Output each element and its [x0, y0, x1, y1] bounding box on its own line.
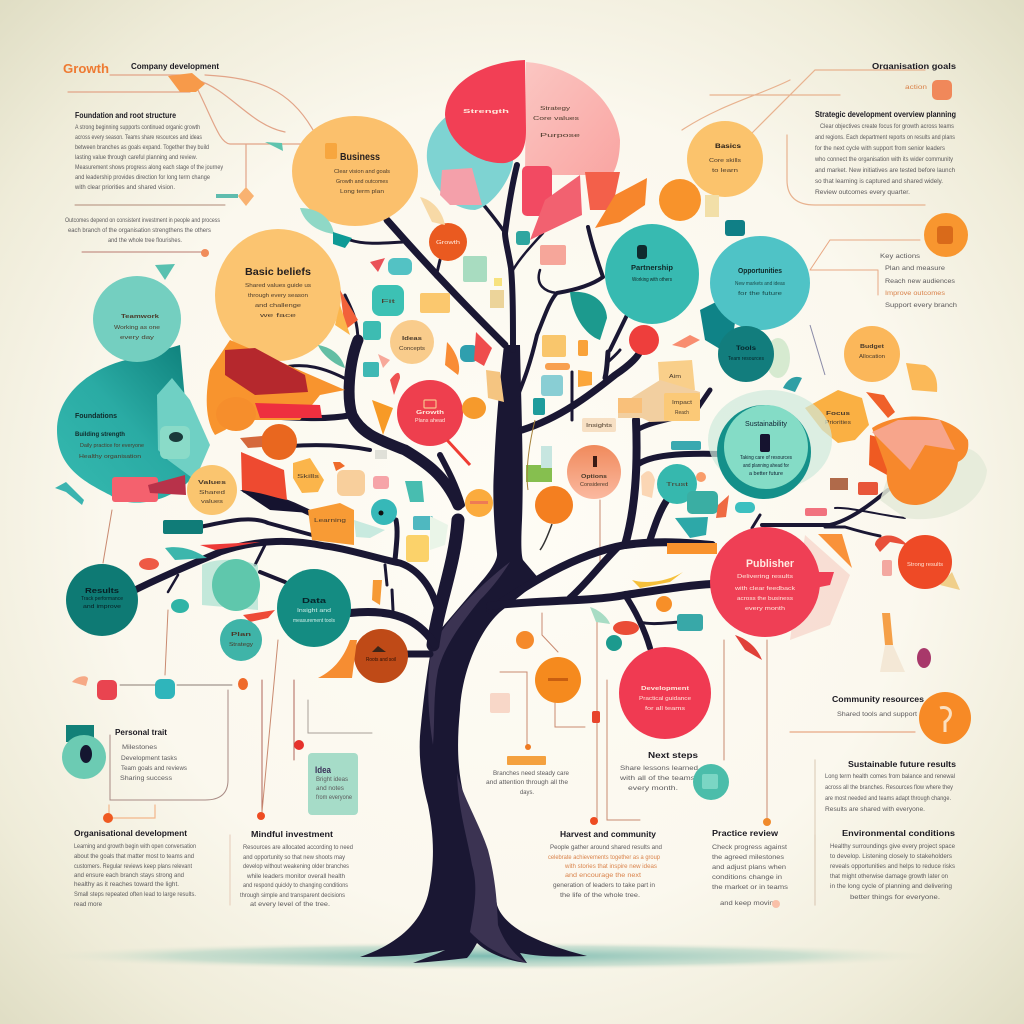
text panel: bottom column 4: and keep moving. [720, 901, 780, 907]
text panel: bottom column 4: and adjust plans when [712, 865, 786, 871]
text panel: top left: Growth [63, 61, 109, 76]
text panel: bottom column 2: develop without weakening older branches [243, 864, 349, 870]
circle: dark teal lower left: and improve [83, 604, 121, 610]
text panel: bottom column 1: healthy as it reaches toward the light. [74, 882, 179, 888]
tags and leaves centre right: Trust [666, 482, 689, 488]
text panel: bottom column 1: Small steps repeated often lead to large results. [74, 892, 196, 898]
circles: left cluster: Strategy [229, 642, 253, 648]
text panel: upper right callout [810, 240, 957, 309]
text panel: top left: between branches as goals expand. Together they build [75, 145, 209, 151]
text panel: centre below tree: every month. [628, 786, 678, 792]
circle: red lower: Practical guidance [639, 696, 691, 702]
text panel: top right: Strategic development overview planning [815, 110, 956, 119]
text panel: upper right callout: Support every branch [885, 303, 957, 309]
small leaves and tags upper left tree: Ideas [402, 336, 422, 342]
circles: left cluster: measurement tools [293, 618, 335, 624]
circles: centre right of trunk [465, 418, 621, 550]
text panel: centre below tree: and attention through all the [486, 780, 569, 786]
ribbon cluster left [112, 340, 345, 613]
circle: red lower [619, 647, 711, 739]
right orange cluster: Budget [860, 344, 884, 350]
note card: mint [308, 753, 358, 815]
text panel: upper right callout: Improve outcomes [885, 291, 945, 297]
text panel: top left: Measurement shows progress along each stage of the journey [75, 165, 223, 171]
circle: big red right: across the business [737, 596, 794, 602]
circle: teal upper right: Working with others [632, 277, 672, 283]
text panel: top right: so that learning is captured and shared widely. [815, 179, 943, 185]
circle: orange topic top: Growth and outcomes [336, 179, 388, 185]
text panel: bottom column 5: Environmental conditions [842, 829, 956, 838]
text panel: bottom column 1: customers. Regular reviews keep plans relevant [74, 864, 192, 870]
tags upper centre right [516, 231, 592, 415]
circle: teal ring: Taking care of resources [740, 455, 792, 461]
circle: red centre: Growth [416, 410, 444, 416]
circle: orange lower centre [535, 657, 581, 703]
text panel: top right: and regions. Each department reports on results and plans [815, 135, 955, 141]
bubble group: top red and pink: Strength [463, 109, 509, 115]
text panel: lower right heading: Results are shared with everyone. [825, 807, 925, 813]
ground shadow [40, 942, 940, 970]
text panel: bottom column 1 [74, 829, 196, 908]
circle: yellow upper right: Core skills [709, 158, 741, 164]
note card: mint: and notes [316, 786, 344, 792]
circle: orange topic top [292, 116, 418, 226]
text panel: lower right heading: Shared tools and support [837, 712, 917, 718]
circle: large orange [215, 229, 341, 361]
circles: left cluster: Insight and [297, 608, 331, 614]
circle: large orange: and challenge [255, 303, 301, 309]
text panel: top left: Outcomes depend on consistent investment in people and process [65, 218, 220, 224]
circle: large orange: Basic beliefs [245, 267, 311, 278]
text panel: bottom column 3: celebrate achievements together as a group [548, 855, 661, 861]
text panel: bottom column 3: People gather around shared results and [550, 845, 662, 851]
text panel: top left: and the whole tree flourishes. [108, 238, 182, 244]
text panel: top right: Review outcomes every quarter. [815, 190, 910, 196]
text panel: bottom column 5: better things for everyone. [850, 895, 940, 901]
text panel: top right: for the next cycle with support from senior leaders [815, 146, 945, 152]
text panel: top left: A strong beginning supports continued organic growth [75, 125, 200, 131]
text panel: top left: Company development [131, 62, 219, 71]
circle: light teal: Teamwork [121, 314, 160, 320]
callout: lower left framed note: Milestones [122, 745, 157, 751]
circle: teal upper right [605, 224, 825, 392]
text panel: upper right callout: Reach new audiences [885, 279, 955, 285]
left limb [433, 520, 458, 645]
text panel: bottom column 3: with stories that inspire new ideas [564, 864, 657, 870]
text panel: centre below tree: Share lessons learned [620, 766, 698, 772]
trunk [360, 345, 587, 963]
icon: teal badge lower left [62, 725, 106, 779]
circle: red lower: Development [641, 686, 689, 692]
text panel: bottom column 4: Practice review [712, 829, 779, 838]
right orange cluster: Priorities [825, 420, 851, 426]
circle: big teal: Daily practice for everyone [80, 443, 144, 449]
text panel: top left: with clear priorities and shared vision. [74, 185, 175, 191]
callout: lower left framed note: Sharing success [120, 776, 172, 782]
tags and leaves centre right [490, 292, 755, 713]
note card: mint: Bright ideas [316, 777, 348, 783]
text panel: bottom column 5: reveals opportunities and helps to reduce risks [830, 864, 955, 870]
circle: yellow upper right: to learn [712, 168, 738, 174]
tags and leaves centre right: Impact [672, 400, 693, 406]
text panel: top left [63, 61, 313, 257]
circles: left cluster: Shared [199, 490, 225, 496]
text panel: bottom column 4: conditions change in [712, 875, 782, 881]
text panel: bottom column 4: the market or in teams [712, 885, 788, 891]
text panel: top left: and leadership provides direction for long term change [75, 175, 211, 181]
circle: big red right [710, 527, 852, 660]
text panel: bottom column 3: and encourage the next [565, 873, 641, 879]
text panel: lower right heading: Sustainable future results [848, 760, 957, 769]
circle: teal upper right: Opportunities [738, 268, 782, 275]
text panel: bottom column 5 [815, 829, 956, 905]
text panel: bottom column 2: and opportunity so that new shoots may [243, 855, 345, 861]
small tags lower left [72, 676, 248, 700]
circle: teal upper right: Partnership [631, 265, 673, 272]
tags and leaves centre right: Aim [669, 374, 682, 380]
circles: left cluster: Values [198, 480, 226, 486]
text panel: bottom column 3 [548, 830, 662, 899]
text panel: upper right callout: Key actions [880, 254, 920, 260]
bubble group: top red and pink: Core values [533, 116, 579, 122]
circle: dark teal lower left [66, 564, 138, 636]
circle: large orange: Shared values guide us [245, 283, 311, 289]
circle: big red right: with clear feedback [735, 586, 796, 592]
callout: lower left framed note: Team goals and reviews [121, 766, 187, 772]
circle: red centre [397, 380, 486, 465]
circle: yellow upper right [659, 121, 763, 236]
text panel: bottom column 2: through simple and transparent decisions [240, 893, 345, 899]
circle: red orange far right [880, 535, 960, 672]
circles: centre right of trunk: Insights [586, 423, 612, 429]
trunk highlight upper [428, 562, 510, 745]
text panel: bottom column 1: and ensure each branch stays strong and [74, 873, 184, 879]
text panel: bottom column 4 [712, 829, 788, 908]
text panel: top right [682, 62, 957, 205]
small leaves and tags upper left tree: Growth [436, 240, 460, 246]
text panel: bottom column 5: Healthy surroundings give every project space [830, 844, 956, 850]
text panel: bottom column 5: in the long cycle of planning and delivering [830, 884, 952, 890]
trunk highlight lower [457, 773, 527, 963]
circle: orange topic top: Clear vision and goals [334, 169, 390, 175]
circle: dark teal lower left: Track performance [81, 596, 123, 602]
text panel: bottom column 3: the life of the whole tree. [560, 893, 640, 899]
circles: left cluster: Data [302, 598, 326, 605]
text panel: bottom column 2: Mindful investment [251, 830, 333, 839]
circle: large orange: through every season [248, 293, 308, 299]
circles: left cluster: Plan [231, 632, 252, 638]
circle: big red right: Publisher [746, 558, 795, 570]
note card: mint: Idea [315, 765, 332, 775]
text panel: upper right callout: Plan and measure [885, 266, 946, 272]
circle: orange lower right [919, 692, 971, 744]
text panel: bottom column 2: at every level of the tree. [250, 902, 330, 908]
circles: centre right of trunk: Considered [580, 482, 608, 488]
text panel: centre below tree: Branches need steady care [493, 771, 570, 777]
circle: big teal: Building strength [75, 432, 125, 438]
circle: light teal: Working as one [114, 325, 160, 331]
note card: mint: from everyone [316, 795, 353, 801]
circle: big teal: Foundations [75, 413, 117, 420]
callout: lower left framed note [103, 680, 372, 823]
circle: teal upper right: for the future [738, 291, 782, 297]
right orange cluster [805, 213, 987, 552]
circle: big red right: Delivering results [737, 574, 794, 580]
text panel: bottom column 1: Learning and growth begin with open conversation [74, 844, 196, 850]
text panel: bottom column 1: read more [74, 902, 103, 908]
text panel: bottom column 4: Check progress against [712, 845, 787, 851]
text panel: bottom column 5: that might otherwise damage growth later on [830, 874, 948, 880]
text panel: lower right heading: are most needed and teams adapt through change. [825, 796, 951, 802]
text panel: centre below tree: Next steps [648, 751, 699, 760]
circle: light teal [93, 264, 181, 362]
circle: teal ring: a better future [749, 471, 783, 477]
text panel: centre below tree: days. [520, 790, 534, 796]
text panel: top left: Foundation and root structure [75, 111, 176, 120]
circle: red orange far right: Strong results [907, 562, 944, 568]
text panel: top right: who connect the organisation with its wider community [814, 157, 953, 163]
small leaves and tags upper left tree: Fit [381, 299, 396, 305]
circles: left cluster: values [201, 499, 223, 505]
text panel: centre below tree: with all of the teams [619, 776, 695, 782]
circle: teal upper right: Team resources [728, 356, 764, 362]
text panel: bottom column 3: Harvest and community [560, 830, 657, 839]
bubble group: top red and pink [427, 60, 647, 240]
right branches [490, 542, 712, 610]
text panel: bottom column 2: while leaders monitor overall health [246, 874, 345, 880]
text panel: bottom column 4: the agreed milestones [712, 855, 784, 861]
text panel: top left: lasting value through careful planning and review. [75, 155, 197, 161]
text panel: top right: action [905, 85, 927, 91]
text panel: top right: and market. New initiatives are tested before launch [815, 168, 955, 174]
circle: teal ring: Sustainability [745, 421, 788, 428]
main branches [505, 165, 517, 350]
circle: teal upper right: Tools [736, 346, 757, 352]
circle: large orange: we face [258, 313, 296, 319]
right orange cluster: Allocation [859, 354, 885, 360]
tree [135, 165, 905, 963]
bubble group: top red and pink: Purpose [540, 133, 580, 139]
thin hanging connectors [103, 500, 771, 826]
text panel: lower right heading [790, 695, 957, 905]
circle: yellow upper right: Basics [715, 144, 742, 150]
circles: left cluster: Skills [297, 474, 319, 480]
circle: red lower: for all teams [645, 706, 686, 712]
circle: big teal: Healthy organisation [79, 454, 141, 460]
callout: lower left framed note: Development tasks [121, 756, 177, 762]
circle: teal ring [708, 390, 832, 499]
circle: light teal: every day [120, 335, 154, 341]
circle: dark teal lower left: Results [85, 588, 119, 595]
circle: big red right: every month [745, 606, 785, 612]
circles: left cluster: Roots and soil [366, 657, 396, 663]
text panel: lower right heading: Long term health comes from balance and renewal [825, 774, 955, 780]
badge: teal lower right [693, 764, 729, 800]
circle: red centre: Plans ahead [415, 418, 445, 424]
text panel: bottom column 2: and respond quickly to changing conditions [243, 883, 348, 889]
text panel: lower right heading: across all the branches. Resources flow where they [825, 785, 953, 791]
circle: teal upper right: New markets and ideas [735, 281, 785, 287]
text panel: bottom column 2 [230, 830, 353, 908]
circle: teal ring: and planning ahead for [743, 463, 789, 469]
text panel: centre below tree [486, 751, 699, 796]
text panel: bottom column 1: about the goals that matter most to teams and [74, 854, 194, 860]
text panel: top left: each branch of the organisation strengthens the others [68, 228, 211, 234]
circles: left cluster: Learning [314, 518, 346, 524]
text panel: bottom column 3: generation of leaders to take part in [553, 883, 655, 889]
text panel: bottom column 1: Organisational development [74, 829, 187, 838]
text panel: top left: across every season. Teams share resources and ideas [75, 135, 202, 141]
bubble group: top red and pink: Strategy [540, 106, 570, 112]
text panel: lower right heading: Community resources [832, 695, 925, 704]
circles: centre right of trunk: Options [581, 474, 607, 480]
circle: orange topic top: Business [340, 152, 380, 163]
small leaves and tags upper left tree [300, 197, 504, 435]
tags and leaves centre right: Reach [675, 410, 689, 416]
text panel: top right: Organisation goals [872, 62, 957, 71]
text panel: bottom column 5: to develop. Listening closely to stakeholders [830, 854, 952, 860]
circle: orange topic top: Long term plan [340, 189, 384, 195]
text panel: top right: Clear objectives create focus for growth across teams [820, 124, 954, 130]
text panel: bottom column 2: Resources are allocated according to need [243, 845, 353, 851]
small leaves and tags upper left tree: Concepts [399, 346, 425, 352]
circle: big teal [55, 345, 210, 505]
callout: lower left framed note: Personal trait [115, 728, 167, 737]
circles: left cluster [187, 424, 448, 683]
right orange cluster: Focus [826, 411, 850, 417]
